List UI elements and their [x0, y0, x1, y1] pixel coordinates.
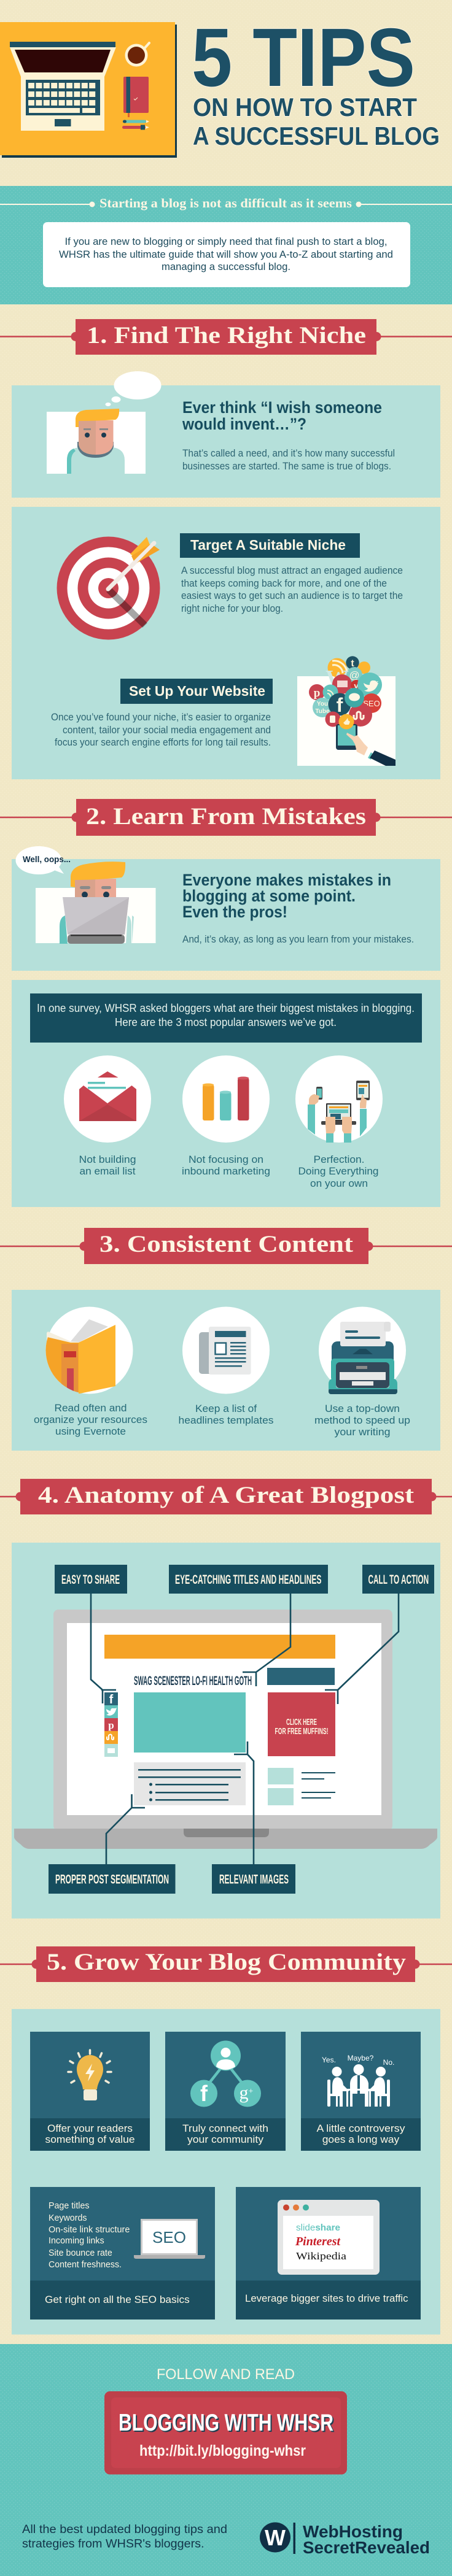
- seo checklist: Incoming links: [49, 2236, 104, 2246]
- title: 5 TIPS: [192, 11, 415, 104]
- label: organize your resources: [34, 1414, 147, 1425]
- label: Doing Everything: [298, 1165, 378, 1177]
- label: target a suitable niche: Target A Suitable Niche: [190, 537, 346, 553]
- title: [192, 11, 440, 150]
- heading: [182, 871, 391, 921]
- section heading 3: 3. Consistent Content: [99, 1231, 353, 1257]
- tile: leverage bigger sites: Leverage bigger sites to drive traffic: [245, 2293, 408, 2304]
- body text: website: focus your search engine efforts for long tail results.: [55, 736, 271, 748]
- hero illustration: desk with laptop: [0, 22, 177, 158]
- body text: target: that keeps coming back for more, and one of the: [181, 577, 387, 589]
- icon: book: [45, 1307, 133, 1394]
- icon: notebook: [123, 77, 149, 117]
- call to action button: BLOGGING WITH WHSR: [119, 2410, 333, 2436]
- icon: coffee cup: [125, 43, 149, 66]
- tile: connect with community: Truly connect with: [182, 2123, 268, 2134]
- seo checklist: Site bounce rate: [49, 2248, 112, 2258]
- label: [34, 1402, 147, 1437]
- logo: WebHosting SecretRevealed: WebHosting: [303, 2522, 403, 2541]
- label: relevant images: [212, 1864, 295, 1894]
- icon: social media cluster with phone: v: [354, 681, 359, 690]
- icon: bar columns: [182, 1055, 270, 1143]
- image placeholder: [134, 1692, 246, 1753]
- browser window with site names: Wikipedia: [296, 2250, 347, 2262]
- body text: target: [181, 565, 403, 614]
- tile: seo basics: Get right on all the SEO basics: [45, 2294, 190, 2305]
- body text: website: [51, 711, 271, 748]
- section heading 4: [0, 1479, 452, 1514]
- section heading 2: [0, 799, 452, 836]
- label: eye-catching titles: EYE-CATCHING TITLES AND HEADLINES: [175, 1573, 322, 1587]
- call to action block: FOR FREE MUFFINS!: [275, 1726, 328, 1737]
- section heading 3: [0, 1228, 452, 1264]
- person hiding behind laptop illustration: [16, 846, 156, 944]
- body text: businesses are started. The same is true of blogs.: [182, 460, 391, 472]
- tile: seo basics: [30, 2187, 215, 2320]
- intro band: [0, 186, 452, 304]
- icon: community network: g: [240, 2083, 249, 2103]
- label: easy to share: [55, 1565, 127, 1594]
- connector: relevant images: [234, 1741, 254, 1864]
- browser window with site names: Pinterest: [295, 2235, 341, 2248]
- label: method to speed up: [314, 1414, 410, 1426]
- panel: target niche and website: [12, 507, 440, 779]
- call to action block: [268, 1692, 335, 1756]
- body text: website: content, tailor your social media engagement and: [63, 724, 271, 736]
- icon: newspaper: [182, 1307, 270, 1394]
- panel: wish someone would invent: [12, 371, 440, 498]
- body text: target: A successful blog must attract an engaged audience: [181, 565, 403, 576]
- logo: WebHosting SecretRevealed: SecretRevealed: [303, 2538, 430, 2557]
- speech bubble: [16, 846, 71, 874]
- section heading 2: 2. Learn From Mistakes: [86, 803, 366, 830]
- intro card: WHSR has the ultimate guide that will show you A-to-Z about starting and: [59, 249, 393, 260]
- section heading 1: 1. Find The Right Niche: [87, 322, 366, 349]
- label: inbound marketing: [182, 1165, 270, 1177]
- sidebar thumbnails: [268, 1768, 335, 1805]
- panel: consistent content tips: [12, 1290, 440, 1451]
- label: Read often and: [54, 1402, 127, 1414]
- label: using Evernote: [55, 1425, 126, 1437]
- seo checklist: On-site link structure: [49, 2225, 130, 2235]
- heading: Ever think “I wish someone: [182, 398, 382, 417]
- body text: target: easiest ways to get such an audience is to target the: [181, 590, 403, 601]
- label: [182, 1154, 270, 1177]
- logo: WebHosting SecretRevealed: W: [265, 2525, 286, 2550]
- logo: WebHosting SecretRevealed: [260, 2522, 430, 2557]
- label: Keep a list of: [195, 1403, 257, 1414]
- icon: social media cluster with phone: [297, 656, 395, 766]
- share icons: [104, 1692, 118, 1757]
- panel: anatomy of a blogpost: [12, 1543, 440, 1918]
- share icons: p: [108, 1719, 114, 1731]
- seo checklist: [49, 2201, 130, 2270]
- footer note: [22, 2523, 227, 2550]
- tile: controversy: A little controversy: [317, 2123, 405, 2134]
- seo checklist: Page titles: [49, 2201, 90, 2211]
- intro subheading: Starting a blog is not as difficult as it seems: [99, 196, 352, 210]
- icon: social media cluster with phone: p: [314, 687, 320, 700]
- icon: email envelope: [64, 1055, 151, 1143]
- icon: social media cluster with phone: Tube: [315, 708, 330, 715]
- icon: hands on devices: [295, 1055, 383, 1143]
- body text: That’s called a need, and it’s how many successful: [182, 447, 395, 459]
- icon: meeting people: [322, 2054, 394, 2107]
- panel: biggest mistakes survey: [12, 980, 440, 1207]
- tile: leverage bigger sites: [236, 2187, 421, 2320]
- body text: website: Once you’ve found your niche, it’s easier to organize: [51, 711, 271, 723]
- tile: connect with community: your community: [187, 2134, 264, 2145]
- icon: social media cluster with phone: f: [337, 694, 343, 716]
- laptop mockup: [14, 1610, 437, 1849]
- footer note: strategies from WHSR's bloggers.: [22, 2538, 204, 2550]
- panel: grow community: [12, 2009, 440, 2334]
- tile: connect with community: [165, 2032, 286, 2151]
- tile: controversy: [301, 2032, 421, 2151]
- icon: pens: [122, 120, 149, 130]
- heading: Everyone makes mistakes in: [182, 871, 391, 889]
- label: set up your website: Set Up Your Website: [129, 683, 265, 699]
- label: target a suitable niche: [180, 533, 360, 558]
- title: ON HOW TO START: [193, 93, 417, 121]
- label: relevant images: RELEVANT IMAGES: [219, 1873, 289, 1886]
- label: [79, 1154, 136, 1177]
- heading: would invent…”?: [182, 415, 306, 433]
- seo checklist: Keywords: [49, 2213, 87, 2223]
- section heading 4: 4. Anatomy of A Great Blogpost: [38, 1482, 414, 1508]
- survey banner: In one survey, WHSR asked bloggers what are their biggest mistakes in blogging.: [37, 1002, 415, 1014]
- icon: community network: [190, 2041, 261, 2107]
- label: an email list: [80, 1165, 136, 1177]
- label: Not building: [79, 1154, 136, 1165]
- connector: easy to share: [91, 1594, 116, 1703]
- icon: community network: f: [200, 2081, 208, 2106]
- connector: call to action: [325, 1594, 399, 1704]
- tile: offer value: [30, 2032, 150, 2151]
- intro card: If you are new to blogging or simply need that final push to start a blog,: [65, 236, 387, 247]
- icon: social media cluster with phone: W: [325, 666, 349, 692]
- icon: target with arrow: [56, 536, 160, 639]
- icon: laptop: [10, 42, 116, 131]
- share icons: f: [109, 1693, 114, 1706]
- call to action button: http://bit.ly/blogging-whsr: [139, 2442, 306, 2459]
- heading: [182, 398, 382, 433]
- browser window with site names: [278, 2200, 380, 2275]
- label: proper post segmentation: [49, 1864, 176, 1894]
- label: easy to share: EASY TO SHARE: [61, 1573, 120, 1587]
- laptop mockup: SWAG SCENESTER LO-FI HEALTH GOTH: [134, 1674, 252, 1688]
- icon: social media cluster with phone: SEO: [363, 699, 380, 708]
- label: headlines templates: [178, 1414, 274, 1426]
- tile: offer value: something of value: [45, 2134, 135, 2145]
- segmented post text: [134, 1762, 246, 1805]
- label: [314, 1403, 410, 1438]
- label: eye-catching titles: [169, 1565, 328, 1594]
- label: [298, 1154, 378, 1189]
- icon: meeting people: Yes.: [322, 2056, 336, 2064]
- tile: controversy: goes a long way: [322, 2134, 400, 2145]
- label: proper post segmentation: PROPER POST SEGMENTATION: [55, 1873, 169, 1886]
- heading: Even the pros!: [182, 903, 287, 921]
- connector: post segmentation: [106, 1794, 145, 1864]
- icon: seo laptop: [134, 2219, 205, 2259]
- label: Perfection.: [313, 1154, 365, 1165]
- icon: light bulb: [68, 2050, 111, 2100]
- survey banner: [30, 993, 422, 1043]
- orange title bar: [104, 1635, 335, 1659]
- body text: And, it’s okay, as long as you learn from your mistakes.: [182, 933, 414, 945]
- survey banner: Here are the 3 most popular answers we’ve got.: [115, 1016, 337, 1028]
- speech bubble: Well, oops...: [23, 855, 71, 864]
- section heading 1: [0, 319, 452, 355]
- seo checklist: Content freshness.: [49, 2260, 122, 2270]
- call to action button: [104, 2391, 347, 2474]
- thinking person illustration: [47, 371, 161, 474]
- icon: seo laptop: SEO: [152, 2228, 186, 2246]
- icon: meeting people: No.: [383, 2058, 394, 2067]
- icon: social media cluster with phone: t: [351, 658, 354, 669]
- label: [178, 1403, 274, 1426]
- label: Not focusing on: [189, 1154, 263, 1165]
- icon: social media cluster with phone: You: [317, 701, 328, 708]
- icon: typewriter: [319, 1307, 406, 1394]
- body text: target: right niche for your blog.: [181, 603, 283, 614]
- section heading 5: [0, 1946, 452, 1982]
- footer heading: FOLLOW AND READ: [157, 2366, 295, 2383]
- tile: offer value: Offer your readers: [47, 2123, 133, 2134]
- section heading 5: 5. Grow Your Blog Community: [47, 1949, 407, 1975]
- label: call to action: [362, 1565, 434, 1594]
- label: your writing: [334, 1426, 391, 1438]
- label: Use a top-down: [325, 1403, 400, 1414]
- panel: everyone makes mistakes: [12, 846, 440, 971]
- footer band: [0, 2344, 452, 2576]
- icon: meeting people: Maybe?: [348, 2054, 374, 2062]
- label: set up your website: [120, 679, 273, 704]
- body text: [182, 447, 395, 472]
- call to action block: CLICK HERE: [286, 1717, 317, 1727]
- label: on your own: [310, 1178, 368, 1189]
- heading: blogging at some point.: [182, 887, 356, 905]
- icon: community network: +: [249, 2087, 254, 2096]
- icon: social media cluster with phone: @: [349, 669, 360, 681]
- connector: titles and headlines: [243, 1594, 290, 1686]
- intro card: managing a successful blog.: [162, 261, 290, 272]
- footer note: All the best updated blogging tips and: [22, 2523, 227, 2536]
- intro card: [43, 222, 410, 287]
- browser window with site names: slideshare: [296, 2223, 340, 2233]
